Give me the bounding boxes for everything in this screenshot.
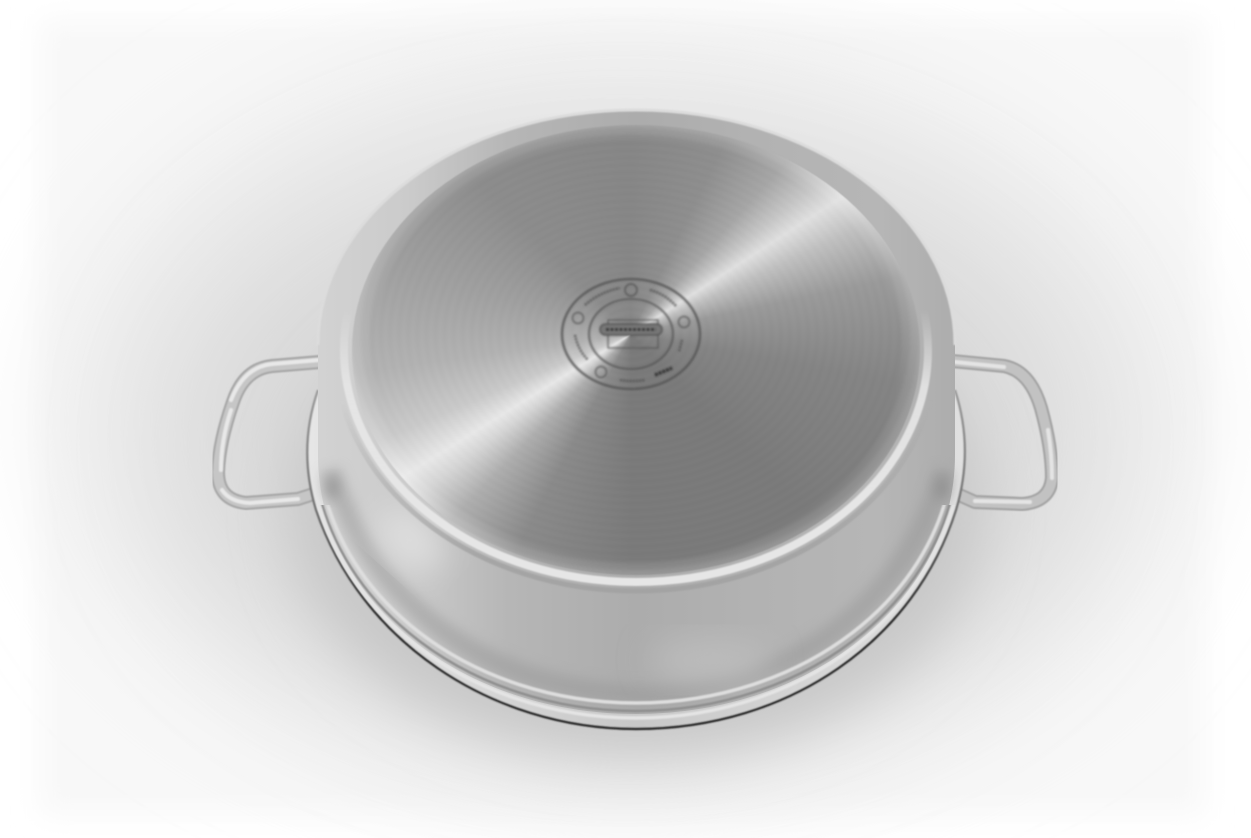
emblem centre logo	[600, 320, 662, 348]
handle rivets	[325, 476, 949, 500]
left handle	[218, 360, 326, 503]
brushed metal base	[352, 125, 920, 575]
emblem icons and ring markings	[572, 284, 690, 381]
right handle	[948, 361, 1052, 504]
rim highlight	[335, 109, 937, 591]
base stamp emblem	[562, 279, 700, 389]
pot body	[310, 109, 962, 718]
lip ridges	[320, 505, 952, 720]
flange	[307, 390, 965, 731]
top rim	[318, 110, 955, 345]
